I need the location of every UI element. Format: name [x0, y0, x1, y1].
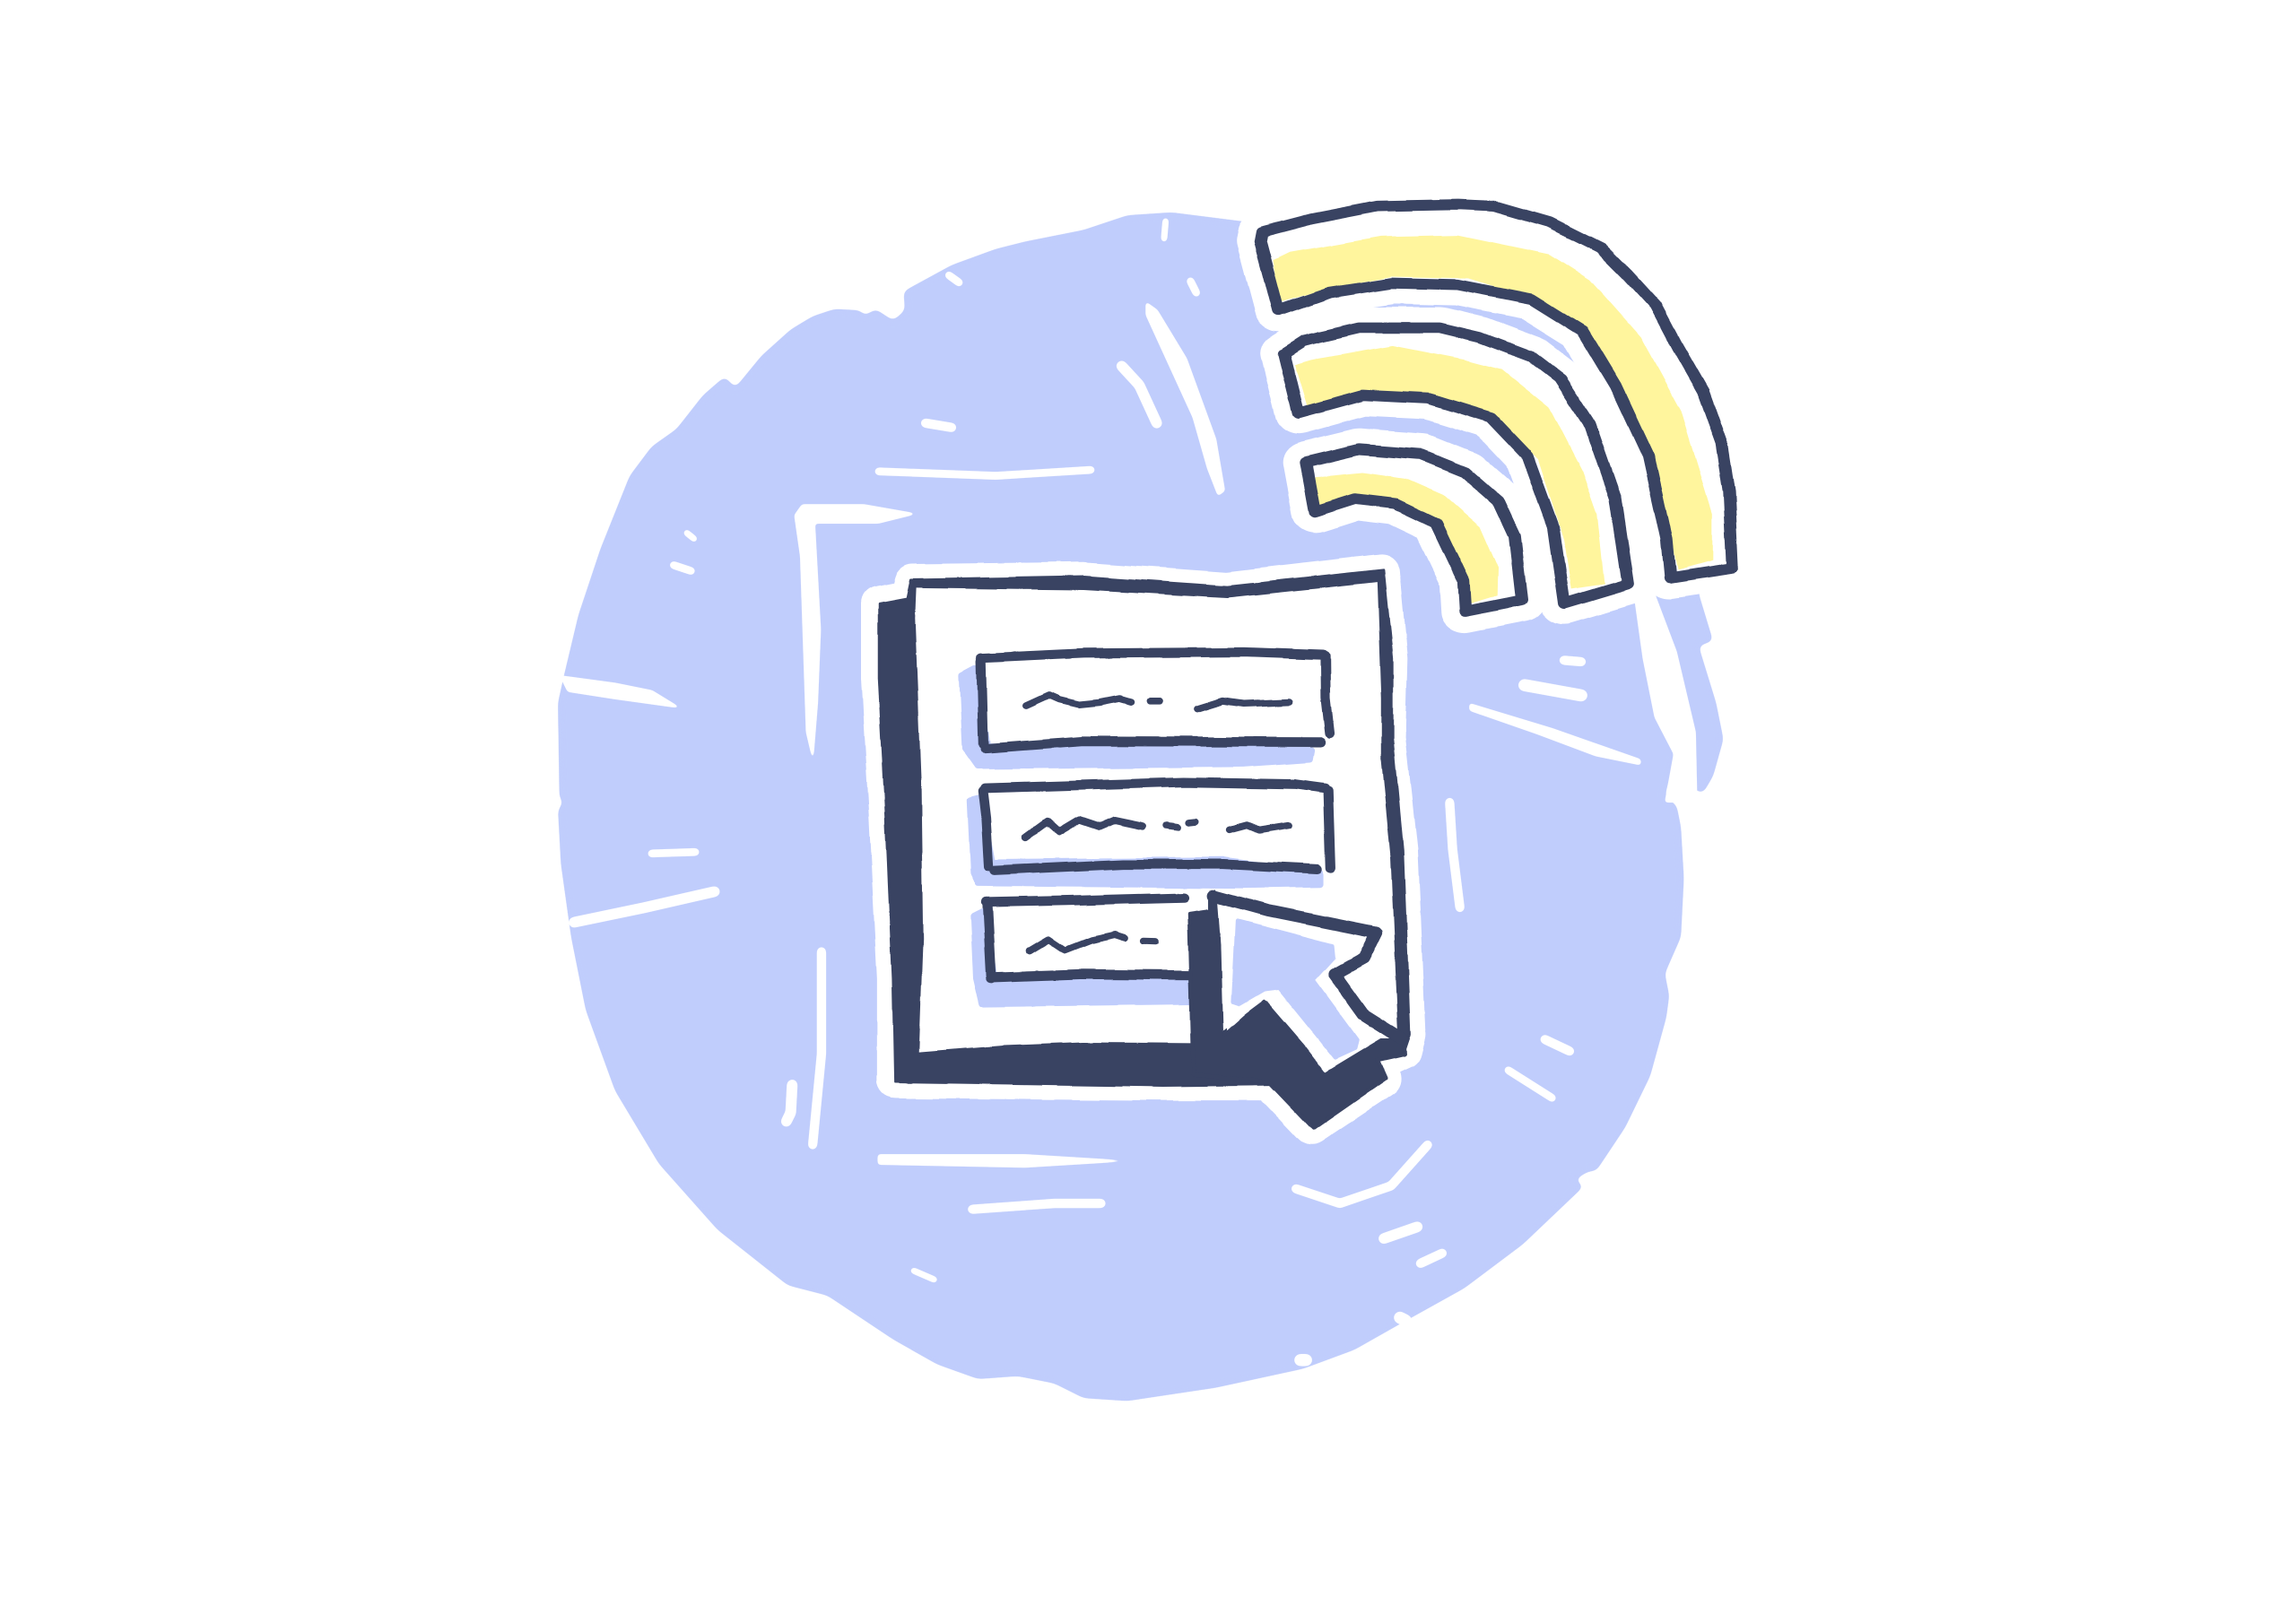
row 3 — [987, 898, 1191, 978]
inner arc — [1306, 449, 1522, 612]
white marks on blob — [561, 221, 1697, 1360]
outer arc outline — [1260, 204, 1733, 577]
wifi sticker outline — [1260, 204, 1733, 612]
bracket stroke upper left — [796, 505, 914, 757]
outer arc yellow fill — [1274, 235, 1712, 569]
inner arc outline — [1306, 449, 1522, 612]
lower flat stroke — [879, 1155, 1120, 1167]
outer arc — [1260, 204, 1733, 577]
long curved stroke upper middle — [1146, 303, 1224, 495]
document white page — [915, 582, 1398, 1055]
cursor blue fill — [1233, 922, 1358, 1057]
middle arc yellow fill — [1295, 345, 1605, 589]
row 2 — [983, 782, 1331, 871]
middle arc — [1284, 328, 1628, 603]
small dashes and strokes — [574, 221, 1581, 1360]
icon: document with list rows and cursor — [879, 570, 1410, 1128]
row 1 — [981, 652, 1330, 749]
inner arc yellow fill — [1315, 472, 1499, 603]
cursor arrow — [1189, 891, 1405, 1128]
wedge stripe beside the wifi icon — [1632, 586, 1697, 803]
left tapered stroke — [561, 676, 678, 707]
cursor white fill — [1220, 908, 1381, 1072]
document sticker outline — [879, 572, 1407, 1126]
icon: wifi signal arcs — [1260, 204, 1733, 612]
row outlines — [981, 652, 1331, 978]
right long stroke — [1470, 704, 1640, 764]
row shadows — [962, 669, 1320, 1004]
cursor outline — [1213, 896, 1402, 1038]
cursor shadow — [1189, 891, 1405, 1128]
blue background blob — [558, 190, 1728, 1401]
middle arc outline — [1284, 328, 1628, 603]
document dark frame — [879, 570, 1410, 1086]
